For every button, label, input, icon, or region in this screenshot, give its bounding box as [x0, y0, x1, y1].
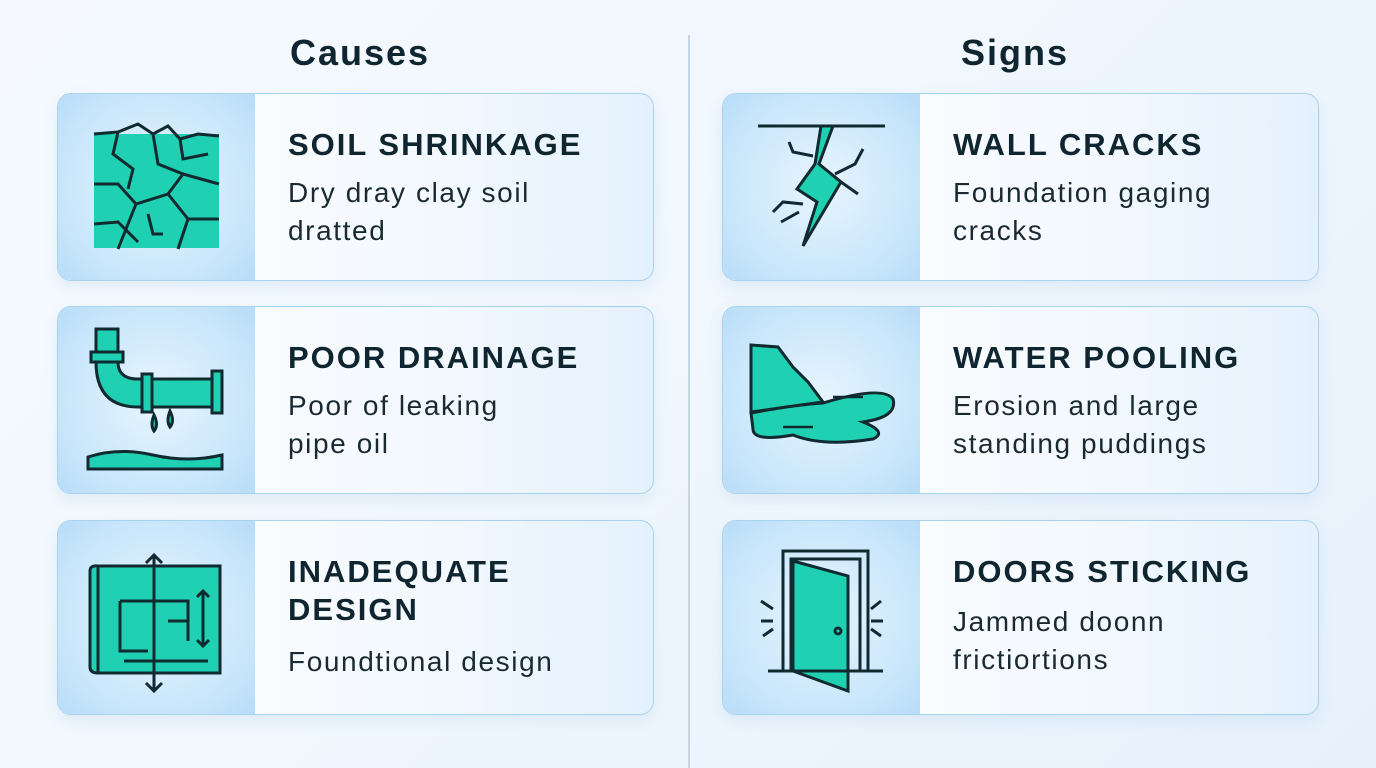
heading: WATER POOLING — [953, 340, 1240, 375]
heading: INADEQUATE — [288, 554, 511, 589]
text: dratted — [288, 215, 386, 246]
text: frictiortions — [953, 644, 1109, 675]
icon: cracked soil — [58, 94, 255, 280]
text: Jammed doonn — [953, 606, 1165, 637]
heading: POOR DRAINAGE — [288, 340, 579, 375]
text: Poor of leaking — [288, 390, 499, 421]
panel: soil shrinkage — [57, 93, 654, 281]
text: Foundtional design — [288, 646, 553, 677]
text: pipe oil — [288, 428, 390, 459]
text: Erosion and large — [953, 390, 1200, 421]
heading — [288, 554, 511, 627]
text — [288, 177, 530, 246]
heading: WALL CRACKS — [953, 127, 1203, 162]
panel: inadequate design — [57, 520, 654, 715]
text — [953, 390, 1208, 459]
panel: doors sticking — [722, 520, 1319, 715]
text: Dry dray clay soil — [288, 177, 530, 208]
heading: DOORS STICKING — [953, 554, 1251, 589]
panel: water pooling — [722, 306, 1319, 494]
icon: blueprint — [58, 521, 255, 714]
panel: poor drainage — [57, 306, 654, 494]
icon: leaking pipe — [58, 307, 255, 493]
icon: water pool — [723, 307, 920, 493]
heading: SOIL SHRINKAGE — [288, 127, 582, 162]
text — [953, 606, 1165, 675]
title: signs: Signs — [961, 32, 1069, 73]
text — [953, 177, 1212, 246]
heading: DESIGN — [288, 592, 419, 627]
text: cracks — [953, 215, 1044, 246]
title: causes: Causes — [290, 32, 430, 73]
text — [288, 390, 499, 459]
text: Foundation gaging — [953, 177, 1212, 208]
panel: wall cracks — [722, 93, 1319, 281]
icon: wall crack — [723, 94, 920, 280]
text: standing puddings — [953, 428, 1208, 459]
icon: door — [723, 521, 920, 714]
